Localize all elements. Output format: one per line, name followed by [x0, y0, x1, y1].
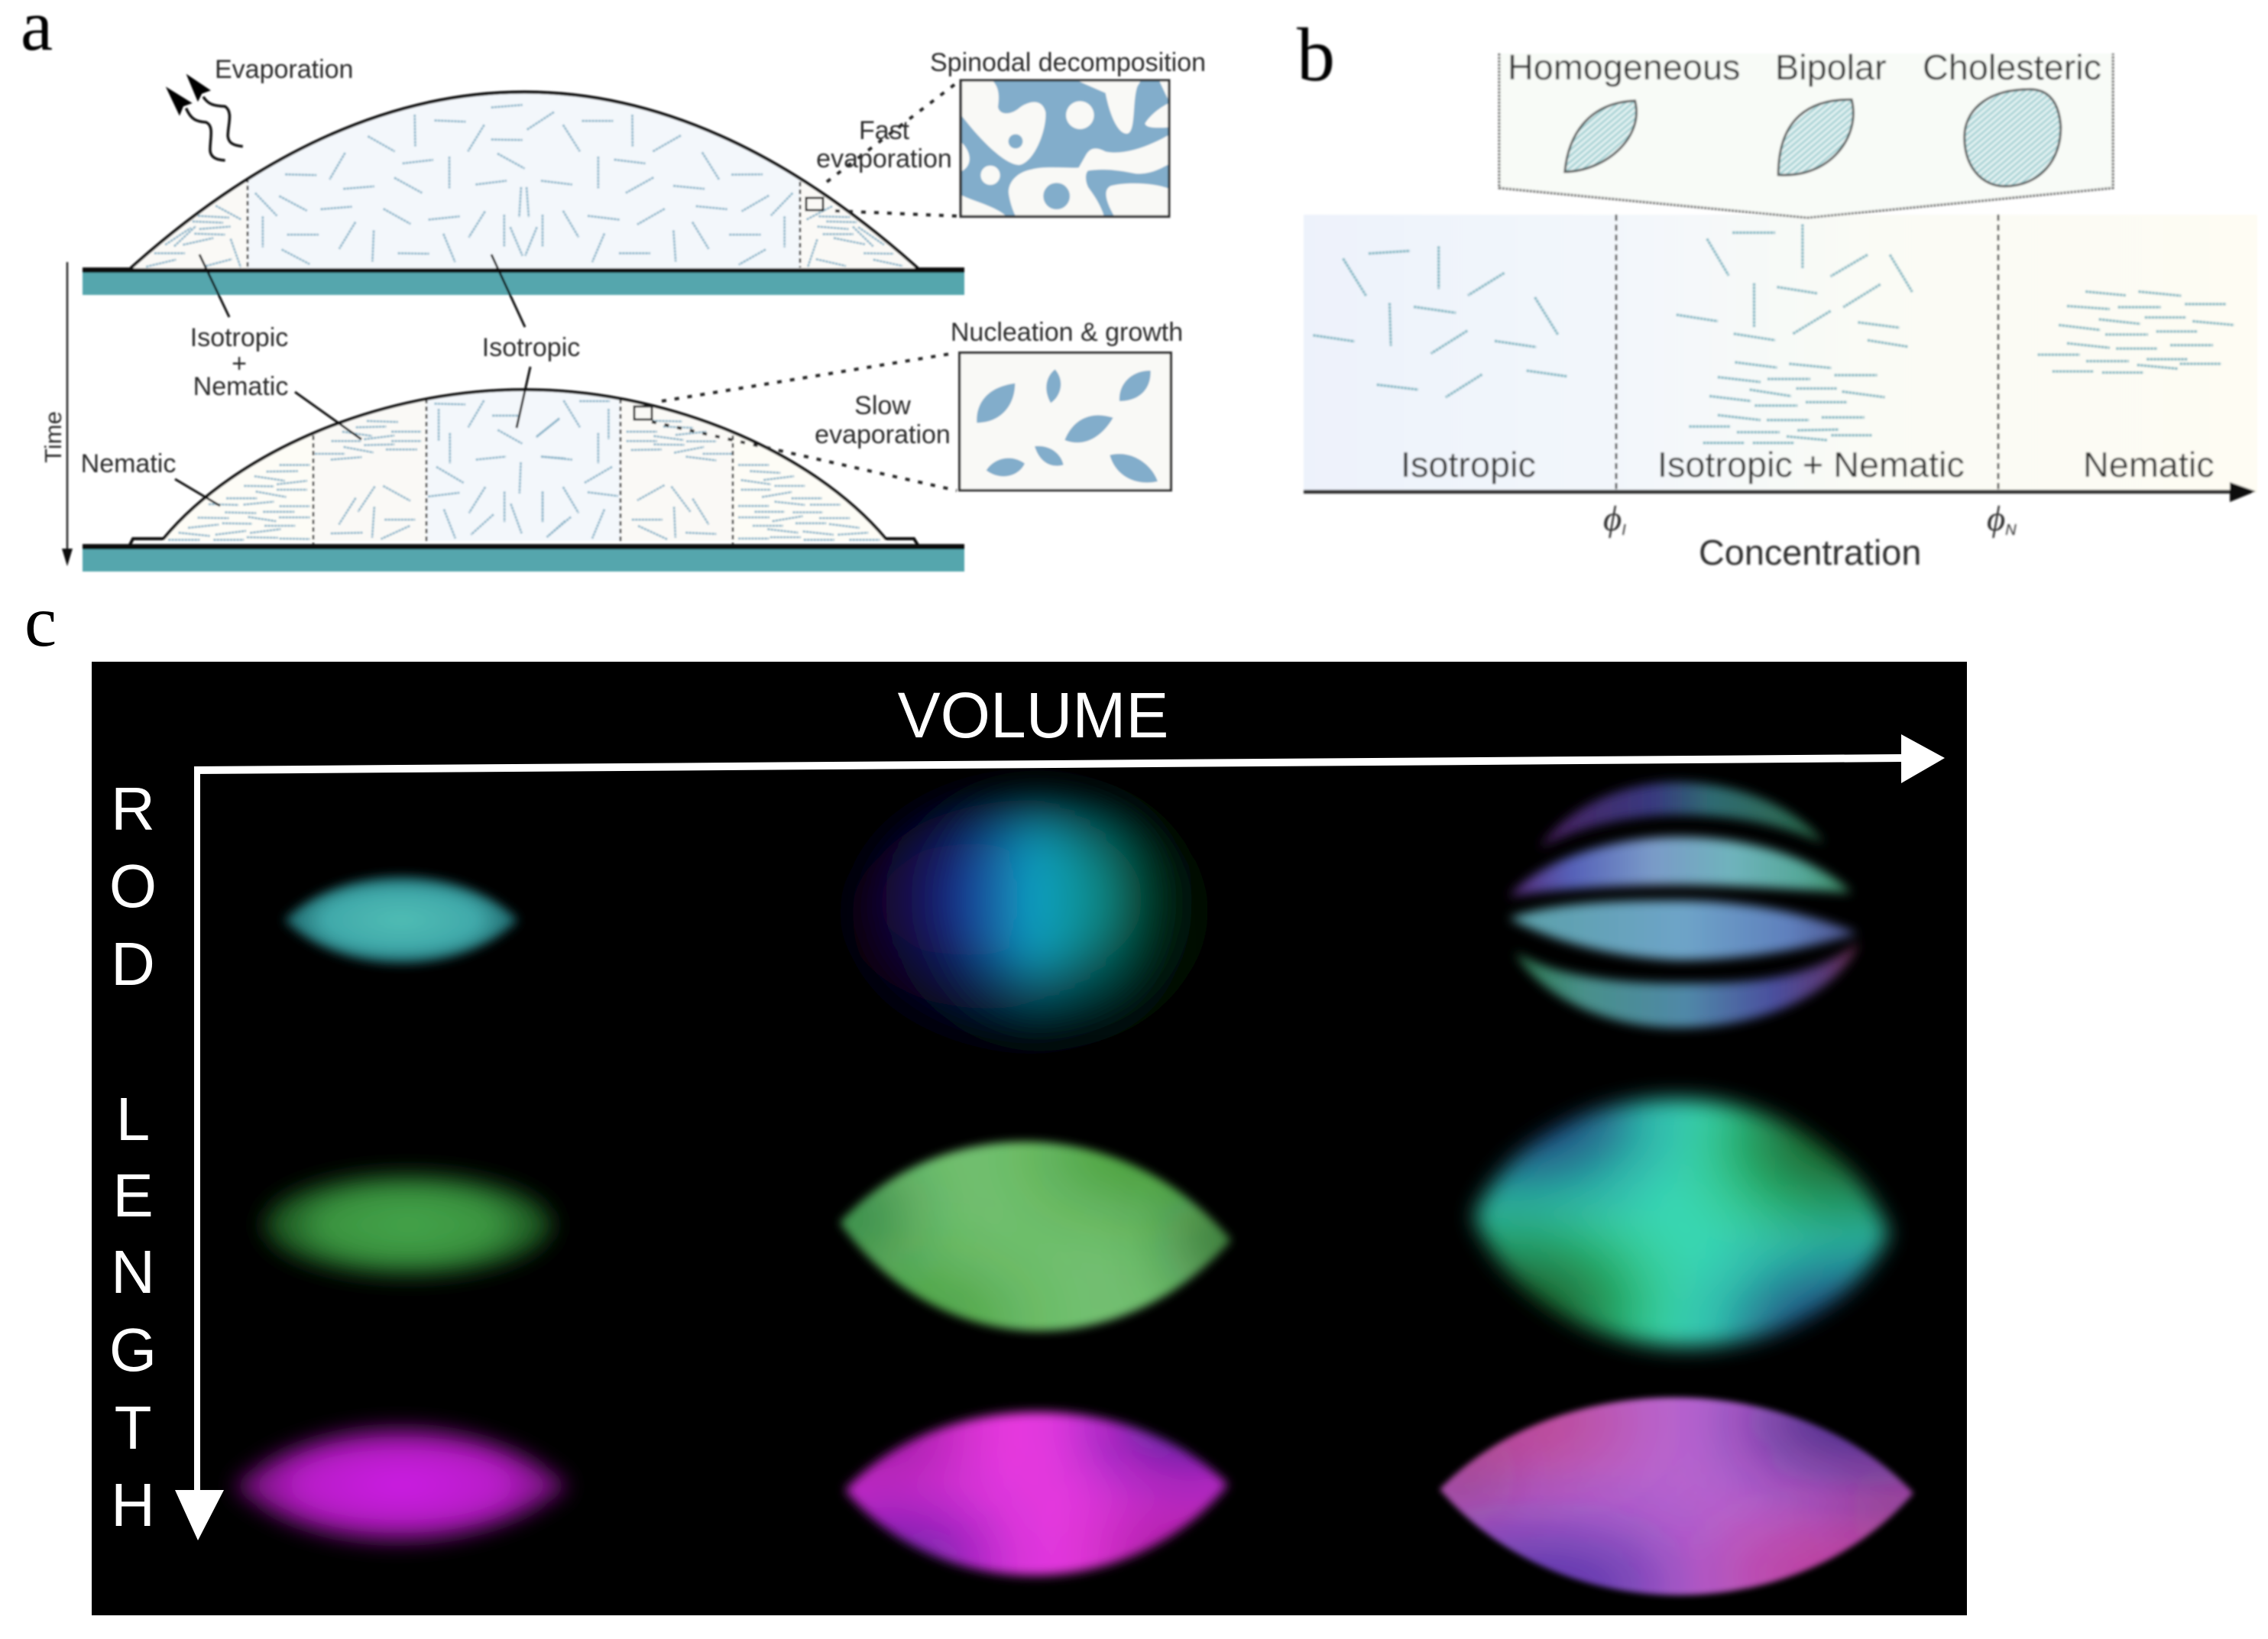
time label: Time	[40, 411, 66, 463]
panel label b: b	[1297, 12, 1335, 97]
phi I label: I	[1622, 522, 1626, 539]
panel b: phase diagram	[1297, 12, 2257, 572]
black backdrop	[92, 662, 1967, 1615]
panel label c: c	[24, 581, 57, 662]
droplet: fast evaporation	[122, 76, 932, 271]
label: Isotropic	[190, 323, 288, 352]
dome outline	[131, 92, 918, 268]
phi N label: N	[2005, 522, 2017, 539]
label: Nematic	[81, 449, 176, 478]
rod length label: R	[111, 775, 155, 843]
rods: nematic region	[2038, 292, 2234, 373]
label: Slow	[854, 391, 911, 420]
label: evaporation	[816, 144, 952, 173]
droplet row 2 column 2	[835, 1134, 1236, 1339]
tactoid callout box	[1499, 53, 2113, 218]
evaporation label: Evaporation	[215, 55, 353, 84]
zone boundaries	[313, 399, 733, 544]
label: evaporation	[815, 420, 951, 449]
dome outline with feet	[130, 390, 918, 545]
droplet row 1 column 1	[284, 876, 518, 964]
rod length label: G	[109, 1316, 157, 1384]
droplet row 3 column 1	[233, 1427, 569, 1542]
phase boundaries	[1616, 215, 1998, 491]
label: Isotropic	[1401, 445, 1536, 484]
phi I label: ϕ	[1603, 499, 1622, 539]
label: Cholesteric	[1923, 47, 2101, 87]
inset frame	[960, 353, 1171, 491]
volume axis arrow	[194, 734, 1945, 783]
panel c: polarized micrographs	[92, 662, 1979, 1635]
rod length label: D	[111, 930, 155, 998]
droplet row 2 column 3	[1461, 1082, 1903, 1364]
label: Nucleation & growth	[951, 318, 1183, 347]
volume label: VOLUME	[898, 679, 1168, 751]
rod length label	[109, 775, 157, 1539]
droplet: slow evaporation	[130, 382, 918, 545]
spinodal lower branch	[1086, 164, 1168, 216]
label: Isotropic	[482, 333, 580, 362]
time axis arrow	[62, 262, 73, 566]
inset: nucleation and growth	[960, 353, 1171, 491]
bipolar droplet	[1778, 99, 1853, 175]
rod length axis arrow	[175, 767, 224, 1540]
label: Spinodal decomposition	[930, 48, 1206, 77]
droplet row 1 column 2	[841, 787, 1218, 1054]
rod length label: H	[111, 1471, 155, 1539]
inset: spinodal decomposition	[961, 80, 1169, 216]
panel a: drying droplet schematic	[21, 0, 1206, 572]
homogeneous droplet	[1565, 101, 1636, 172]
rod length label: E	[112, 1161, 154, 1229]
label: +	[232, 349, 247, 378]
leader lines	[175, 254, 530, 506]
blue islands	[1009, 134, 1070, 209]
rod length label: N	[111, 1238, 155, 1306]
inset marker and projection: fast	[806, 84, 961, 216]
label: Isotropic + Nematic	[1657, 445, 1965, 484]
rods: right half	[536, 400, 880, 539]
background gradient	[1304, 215, 2257, 493]
rods: isotropic left half	[146, 105, 537, 267]
phi N label: ϕ	[1987, 499, 2005, 539]
rods: isotropic region	[1313, 246, 1567, 397]
rods: isotropic plus nematic region	[1677, 225, 1912, 443]
cholesteric droplet	[1965, 89, 2061, 186]
substrate bottom	[83, 544, 964, 572]
droplet row 3 column 3	[1437, 1392, 1916, 1600]
label: Fast	[859, 116, 910, 145]
label: Homogeneous	[1508, 47, 1740, 87]
spinodal network	[961, 80, 1168, 216]
droplet row 3 column 2	[839, 1403, 1233, 1585]
droplet row 2 column 1	[263, 1173, 553, 1277]
inset frame	[961, 80, 1169, 216]
icon: wavy evaporation arrows	[166, 74, 243, 160]
inset marker and projection: slow	[634, 353, 957, 491]
rod length label: O	[109, 852, 157, 920]
rod length label: L	[116, 1085, 150, 1153]
concentration axis arrow	[1304, 482, 2256, 502]
rods: left half	[168, 400, 565, 539]
axis title: Concentration	[1699, 533, 1921, 572]
label: Bipolar	[1775, 47, 1887, 87]
white sliver and holes	[980, 101, 1168, 185]
tactoid leaves	[977, 369, 1158, 483]
label: Nematic	[2083, 445, 2215, 484]
label: Nematic	[193, 372, 288, 401]
rods: isotropic right half	[526, 112, 902, 267]
droplet row 1 column 3: cholesteric stripes	[1509, 782, 1859, 1028]
substrate top	[83, 267, 964, 295]
droplet icons	[1565, 89, 2061, 186]
rod length label: T	[115, 1394, 151, 1462]
zone boundaries	[248, 178, 800, 267]
